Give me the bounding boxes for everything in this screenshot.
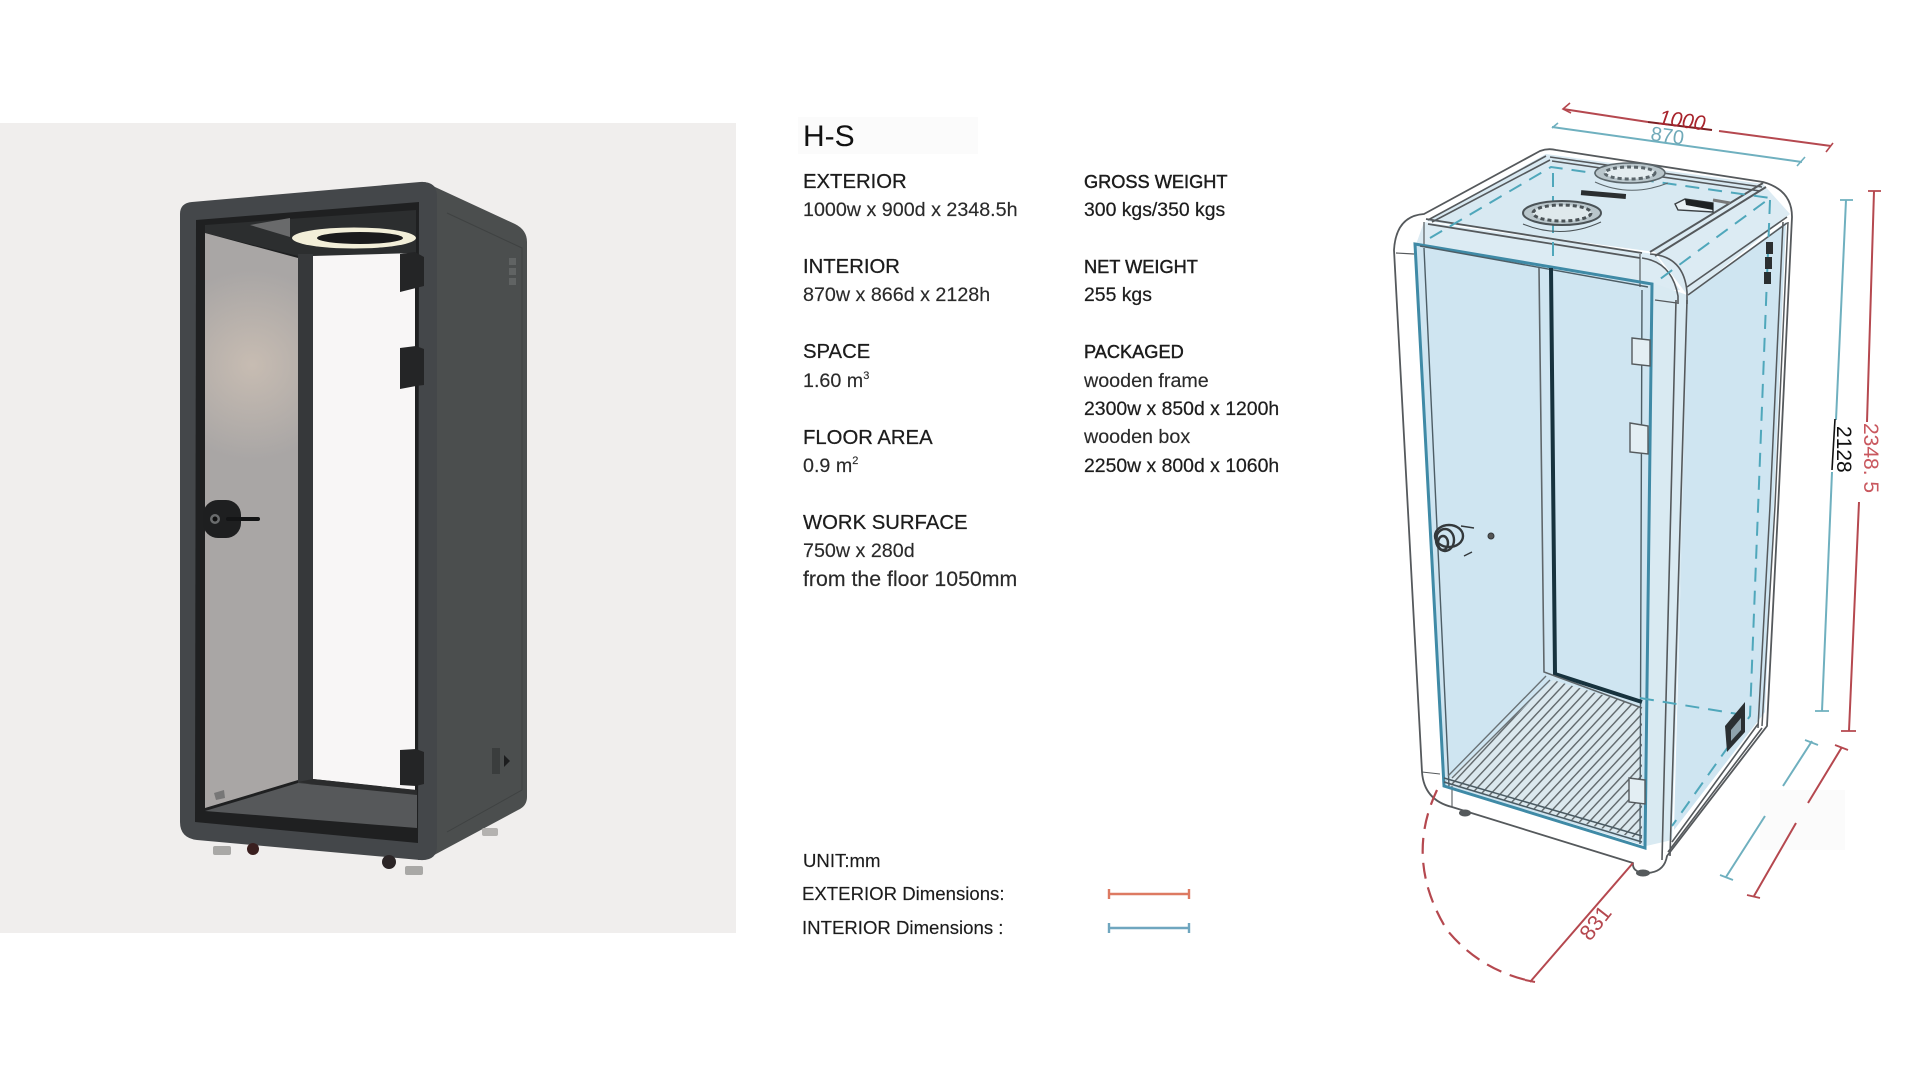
legend: interior: INTERIOR Dimensions : xyxy=(802,917,1003,938)
booth front frame xyxy=(180,182,437,860)
hinge: middle xyxy=(1630,423,1648,454)
roof fan: front xyxy=(1523,201,1601,232)
legend: exterior: EXTERIOR Dimensions: xyxy=(802,883,1005,904)
spec: work surface xyxy=(803,512,1017,591)
spec: net weight: NET WEIGHT xyxy=(1084,257,1198,277)
back wall post xyxy=(298,254,313,784)
spec: floor area: 0.9 m xyxy=(803,455,852,477)
door frame outline xyxy=(1415,244,1652,848)
side panel inset line xyxy=(447,213,522,832)
feet and casters xyxy=(213,828,498,875)
body fill: front right post xyxy=(1646,283,1690,846)
hinge: bottom xyxy=(1629,778,1645,804)
spec column right xyxy=(1083,172,1279,477)
side socket xyxy=(1725,702,1745,752)
dimension: width interior: 870 xyxy=(1649,123,1685,150)
hinge: top xyxy=(1632,338,1650,366)
roof switch xyxy=(1675,199,1730,212)
body fill: front top band xyxy=(1414,222,1680,290)
spec column left xyxy=(803,171,1018,591)
interior dashed edges xyxy=(1430,167,1770,826)
spec: space: SPACE xyxy=(803,341,870,363)
roof label xyxy=(1581,190,1626,199)
spec: space: 1.60 m xyxy=(803,370,863,392)
spec: floor area xyxy=(803,427,933,477)
hinge: top xyxy=(400,252,424,292)
legend: interior xyxy=(802,917,1189,938)
spec: work surface: WORK SURFACE xyxy=(803,512,968,534)
spec: exterior xyxy=(803,171,1018,221)
spec: packaged: PACKAGED xyxy=(1084,342,1184,362)
dimension: width interior xyxy=(1552,123,1805,166)
spec: floor area: FLOOR AREA xyxy=(803,427,933,449)
dimension: door swing xyxy=(1423,790,1633,982)
spec: space: 3 xyxy=(863,370,869,382)
spec: packaged: wooden frame xyxy=(1083,370,1209,392)
side vents xyxy=(1764,242,1773,284)
spec: interior: INTERIOR xyxy=(803,256,900,278)
spec: work surface: from the floor 1050mm xyxy=(803,567,1017,591)
roof fan: back xyxy=(1595,163,1668,190)
side vents xyxy=(509,258,516,285)
frame inner black edge xyxy=(195,202,419,843)
spec: packaged: wooden box xyxy=(1083,426,1190,448)
legend: exterior xyxy=(802,883,1189,904)
spec: packaged: 2300w x 850d x 1200h xyxy=(1084,398,1279,420)
floor hatching xyxy=(1444,680,1642,840)
floor xyxy=(205,783,417,828)
door lock xyxy=(1435,525,1494,556)
legend xyxy=(802,850,1189,938)
booth side panel xyxy=(418,182,527,860)
technical drawing xyxy=(1394,103,1882,982)
floor back strip xyxy=(298,779,417,800)
spec: packaged: 2250w x 800d x 1060h xyxy=(1084,455,1279,477)
spec: floor area: 2 xyxy=(852,455,858,467)
hinge: bottom xyxy=(400,749,424,786)
spec: interior xyxy=(803,256,990,306)
spec: work surface: 750w x 280d xyxy=(803,540,915,562)
door lock and handle xyxy=(203,500,260,538)
spec: exterior: 1000w x 900d x 2348.5h xyxy=(803,199,1018,221)
spec: space xyxy=(803,341,870,392)
body fill: top xyxy=(1426,154,1763,252)
spec: interior: 870w x 866d x 2128h xyxy=(803,284,990,306)
back opening edge xyxy=(1448,268,1642,778)
dimension: height exterior xyxy=(1841,191,1882,731)
spec: gross weight: GROSS WEIGHT xyxy=(1084,172,1227,192)
left felt wall xyxy=(205,233,298,808)
back glass opening xyxy=(313,253,415,790)
dimension: depth patch xyxy=(1760,790,1845,850)
dimension: depth interior xyxy=(1720,740,1818,880)
dimension: width exterior xyxy=(1563,103,1833,152)
spec: packaged xyxy=(1083,342,1279,477)
dimension: height interior xyxy=(1815,200,1855,711)
body fill: right side xyxy=(1674,222,1786,830)
ceiling xyxy=(205,210,416,256)
dimension: height exterior: 2348. 5 xyxy=(1859,423,1882,493)
spec: gross weight xyxy=(1084,172,1227,221)
outer outline xyxy=(1394,149,1792,873)
side socket xyxy=(492,748,510,774)
patch behind model name xyxy=(798,117,978,154)
feet xyxy=(1459,810,1650,876)
dimension: height interior: 2128 xyxy=(1832,426,1855,473)
spec: net weight xyxy=(1084,257,1198,306)
spec: exterior: EXTERIOR xyxy=(803,171,907,193)
ceiling light wedge xyxy=(250,218,290,237)
dimension: depth exterior xyxy=(1747,745,1848,898)
hinge: middle xyxy=(400,346,424,389)
body fill: top right band xyxy=(1655,184,1790,296)
body fill: front glass xyxy=(1414,243,1653,846)
ceiling ring light xyxy=(292,228,416,248)
dimension: door swing: 831 xyxy=(1574,901,1617,945)
panel: product photo xyxy=(0,123,736,933)
dimension: width exterior: 1000 xyxy=(1657,106,1707,135)
floor vent mark xyxy=(214,790,225,800)
unit label: UNIT:mm xyxy=(803,850,880,871)
title: model name: H-S xyxy=(803,120,855,153)
spec: net weight: 255 kgs xyxy=(1084,284,1152,306)
spec: gross weight: 300 kgs/350 kgs xyxy=(1084,199,1225,221)
